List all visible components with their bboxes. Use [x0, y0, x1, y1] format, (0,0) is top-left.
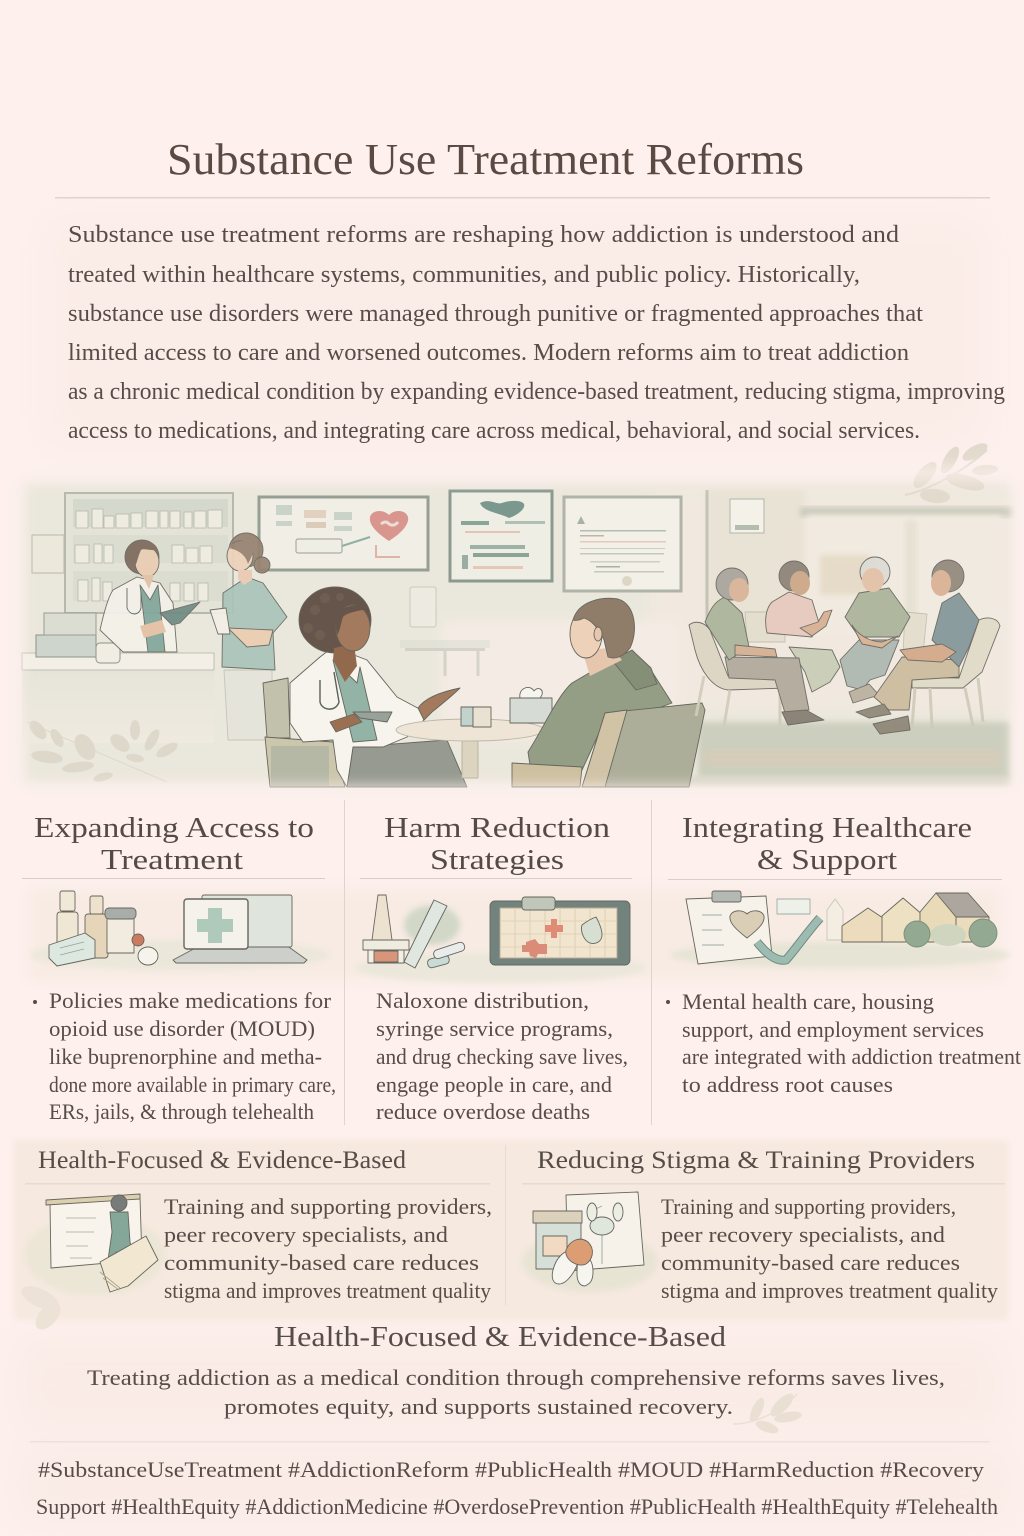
text: reduce overdose deaths: [376, 1099, 590, 1124]
heading: Treatment: [101, 844, 243, 876]
person two: [789, 647, 840, 692]
text: Naloxone distribution,: [376, 988, 589, 1013]
text: [164, 1194, 492, 1303]
floor rug: [698, 722, 1010, 780]
soft fade around hero edge: [14, 473, 1020, 793]
text: bullet list: opioid use disorder (MOUD): [49, 1016, 315, 1041]
text: stigma and improves treatment quality: [164, 1278, 491, 1303]
icon: naloxone kit and map tablet: [355, 895, 645, 983]
panel: expanding access to treatment: [22, 812, 336, 1124]
text: bullet list: are integrated with addiction treatment: [682, 1044, 1021, 1069]
closing text: promotes equity, and supports sustained recovery.: [224, 1394, 733, 1419]
sofa behind middle pair: [745, 612, 927, 654]
person four: [874, 657, 959, 710]
heading: Expanding Access to: [34, 812, 314, 844]
text: engage people in care, and: [376, 1072, 612, 1097]
intro paragraph: limited access to care and worsened outcomes. Modern reforms aim to treat addiction: [68, 340, 909, 366]
text: bullet list: ERs, jails, & through telehealth: [49, 1099, 314, 1124]
figure: doctor with tablet: [100, 540, 200, 652]
text: community-based care reduces: [164, 1250, 479, 1275]
heading: Integrating Healthcare: [682, 812, 972, 844]
figure: nurse with clipboard: [210, 533, 287, 740]
group therapy circle: [689, 557, 1000, 734]
closing heading: Health-Focused & Evidence-Based: [274, 1322, 726, 1353]
figure: patient in hoodie: [512, 598, 705, 787]
text: bullet list: like buprenorphine and metha-: [49, 1044, 322, 1069]
round table with jars and tissue box: [396, 687, 552, 778]
text: bullet list: done more available in primary care,: [49, 1072, 336, 1097]
icon: medications and telehealth laptop: [30, 891, 330, 970]
decorative leaves: lower left: [26, 718, 180, 783]
heading: & Support: [757, 844, 897, 876]
figure: main doctor seated: [263, 587, 467, 787]
intro paragraph: as a chronic medical condition by expanding evidence-based treatment, reducing stigma, improving: [68, 379, 1005, 405]
icon: small leaf sprig: [733, 1390, 803, 1436]
heading: Harm Reduction: [384, 812, 611, 844]
text: bullet list: [666, 989, 1021, 1097]
text: bullet list: Mental health care, housing: [682, 989, 934, 1014]
background desk monitor: [400, 587, 490, 676]
wall poster: heart: [259, 497, 428, 570]
panel: harm reduction strategies: [355, 812, 645, 1124]
icon: botanical print and capsules: [522, 1192, 658, 1292]
icon: care chart and recovering figure: [25, 1194, 165, 1295]
heading: Strategies: [430, 844, 564, 876]
hashtags: Support #HealthEquity #AddictionMedicine #OverdosePrevention #PublicHealth #HealthEquity #Telehealth: [36, 1494, 998, 1519]
text: Training and supporting providers,: [164, 1194, 492, 1219]
text: community-based care reduces: [661, 1250, 960, 1275]
back room window: [705, 490, 1012, 635]
icon: care plan clipboard and houses: [670, 891, 1010, 968]
hashtags: [36, 1457, 998, 1519]
decorative leaves: upper right: [905, 440, 998, 504]
lower band background: [14, 1140, 1008, 1320]
person three: [840, 640, 899, 690]
text: bullet list: [33, 988, 336, 1124]
text: peer recovery specialists, and: [164, 1222, 448, 1247]
text: bullet list: Policies make medications for: [49, 988, 332, 1013]
panel: integrating healthcare and support: [666, 812, 1021, 1097]
reception counter: [22, 613, 214, 743]
heading: [682, 812, 972, 876]
heading: [34, 812, 314, 876]
wall certificate: [564, 497, 681, 591]
panel: reducing stigma and training providers: [522, 1147, 1005, 1303]
intro paragraph: treated within healthcare systems, communities, and public policy. Historically,: [68, 262, 860, 288]
hashtags: #SubstanceUseTreatment #AddictionReform #PublicHealth #MOUD #HarmReduction #Recovery: [38, 1457, 984, 1482]
text: [661, 1194, 998, 1303]
text: syringe service programs,: [376, 1016, 613, 1041]
text: stigma and improves treatment quality: [661, 1278, 998, 1303]
closing statement: [87, 1322, 945, 1436]
closing text: [87, 1365, 945, 1419]
text: Training and supporting providers,: [661, 1194, 956, 1219]
decorative leaf: lower left corner: [18, 1281, 65, 1334]
hero illustration: clinic scene: [22, 440, 1012, 787]
intro paragraph: access to medications, and integrating care across medical, behavioral, and social services.: [68, 418, 920, 444]
intro paragraph: substance use disorders were managed through punitive or fragmented approaches that: [68, 301, 923, 327]
pharmacy shelf: [65, 493, 233, 613]
text: bullet list: support, and employment services: [682, 1017, 984, 1042]
column dividers: [344, 800, 345, 1125]
wall poster: chart: [450, 491, 552, 581]
intro paragraph: Substance use treatment reforms are reshaping how addiction is understood and: [68, 222, 899, 248]
intro paragraph: [68, 222, 1005, 444]
icon row wash: [30, 890, 1000, 980]
text: and drug checking save lives,: [376, 1044, 628, 1069]
text: peer recovery specialists, and: [661, 1222, 945, 1247]
text: [376, 988, 628, 1124]
text: bullet list: to address root causes: [682, 1072, 893, 1097]
heading: Reducing Stigma & Training Providers: [537, 1147, 975, 1174]
heading: Health-Focused & Evidence-Based: [38, 1147, 407, 1174]
closing text: Treating addiction as a medical condition through comprehensive reforms saves lives,: [87, 1365, 945, 1390]
title: Substance Use Treatment Reforms: [167, 135, 804, 184]
person one: [725, 657, 809, 713]
panel: health-focused and evidence-based: [25, 1147, 492, 1303]
heading: [384, 812, 611, 876]
